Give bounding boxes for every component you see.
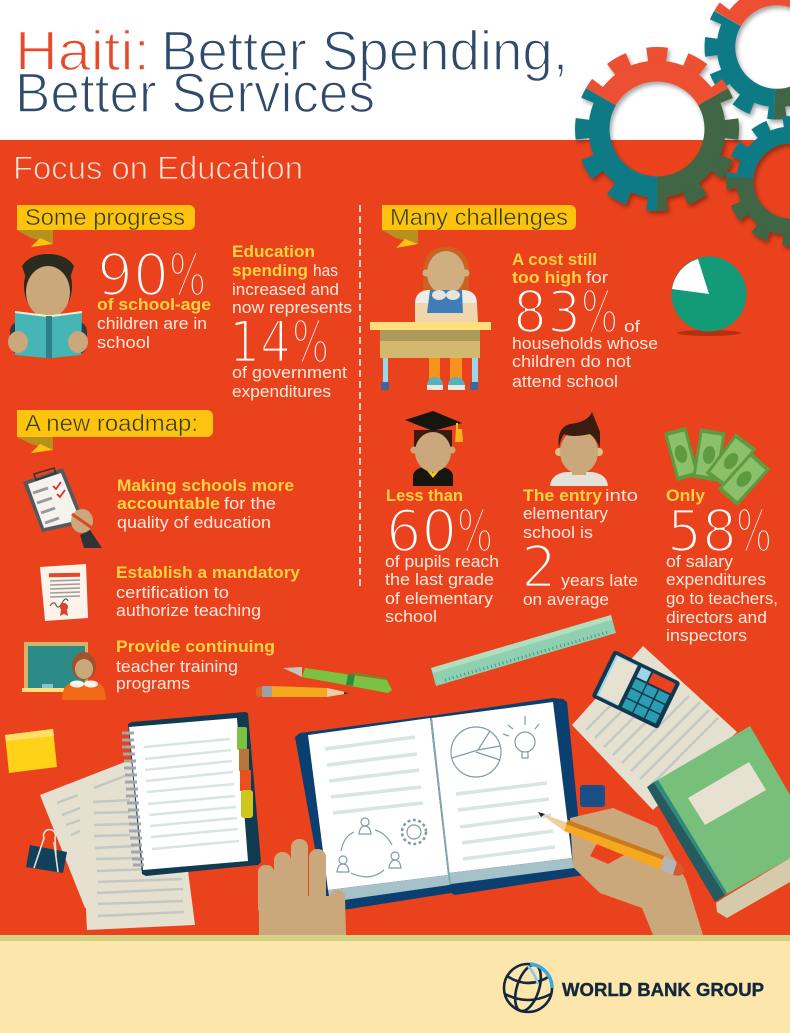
divider <box>359 205 361 590</box>
stat: 58 percent salary: expenditures <box>666 571 766 589</box>
stat: 90 percent in school: of school-age <box>97 296 211 314</box>
stat: 2 years late: 2 <box>521 533 557 601</box>
stat: 83 percent cost too high: children do not <box>512 353 631 371</box>
illustration: green pen <box>283 667 392 693</box>
text: certification <box>116 564 301 620</box>
gear: lower right <box>732 122 790 240</box>
stat: 58 percent salary: % <box>736 497 772 565</box>
stat: 58 percent salary: Only <box>666 487 706 505</box>
stat: 58 percent salary: go to teachers, <box>666 590 778 608</box>
section label: new roadmap: A new roadmap: <box>25 410 198 436</box>
stat: 2 years late: elementary <box>523 505 609 523</box>
stat: 60 percent last grade: Less than <box>386 487 463 505</box>
text: teacher training <box>116 638 275 693</box>
stat: 58 percent salary: of salary <box>666 553 734 571</box>
stat: 83 percent cost too high: % <box>581 278 618 346</box>
logo: World Bank Group <box>504 962 764 1014</box>
stat: 60 percent last grade: of pupils reach <box>385 553 499 571</box>
stat: 90 percent in school: children are in <box>97 315 207 333</box>
stat: 83 percent cost too high: 83 <box>513 278 581 346</box>
stat: 83 percent cost too high: of <box>624 318 640 336</box>
illustration: green book <box>647 726 790 918</box>
illustration: sticky note <box>5 729 57 773</box>
stat: 14 percent spending: expenditures <box>232 383 331 401</box>
stat: 60 percent last grade <box>385 487 499 626</box>
stat: 2 years late: years late <box>561 572 638 590</box>
stat: 90 percent in school: school <box>97 334 150 352</box>
icon: certificate <box>40 564 88 621</box>
section label: some progress: Some progress <box>25 204 185 230</box>
stat: 83 percent cost too high: A cost still <box>512 251 597 269</box>
illustration: loose papers <box>40 760 195 930</box>
stat: 14 percent spending: 14 <box>229 308 291 376</box>
text: accountability: for the <box>224 495 276 513</box>
icon: girl at desk <box>370 247 491 390</box>
title: Better Spending, <box>161 19 568 82</box>
section label: many challenges: Many challenges <box>390 204 568 230</box>
stat: 58 percent salary: inspectors <box>666 627 747 645</box>
gear: large centre <box>582 54 732 204</box>
text: accountability: accountable <box>117 495 220 513</box>
stat: 58 percent salary: 58 <box>667 497 737 565</box>
stat: 60 percent last grade: the last grade <box>385 571 494 589</box>
stat: 83 percent cost too high: for <box>586 269 609 287</box>
stat: 2 years late: on average <box>523 591 609 609</box>
title: Haiti: <box>15 19 150 82</box>
stat: 60 percent last grade: of elementary <box>385 590 494 608</box>
logo: World Bank Group: WORLD BANK GROUP <box>562 979 764 1000</box>
stat: 90 percent in school: % <box>169 241 206 309</box>
section label: some progress <box>17 204 195 247</box>
illustration: right hand with pencil <box>538 808 703 935</box>
text: teacher training: teacher training <box>116 658 238 676</box>
icon: graduate <box>405 411 463 486</box>
stat: 83 percent cost too high: too high <box>512 269 582 287</box>
text: accountability <box>117 477 294 532</box>
title: Better Services <box>15 61 375 124</box>
stat: 58 percent salary: directors and <box>666 609 767 627</box>
sketch: pie and light bulb <box>451 716 539 777</box>
stat: 2 years late <box>521 487 638 609</box>
icon: globe <box>504 962 552 1014</box>
icon: teacher at chalkboard <box>22 642 106 700</box>
subtitle: Focus on Education <box>13 150 303 186</box>
stat: 14 percent spending: Education <box>232 243 315 261</box>
stat: 90 percent in school <box>97 241 211 352</box>
icon: clipboard <box>23 468 102 548</box>
illustration: spiral notebook <box>122 712 261 876</box>
section label: many challenges <box>382 204 576 248</box>
stat: 14 percent spending: now represents <box>232 299 352 317</box>
stat: 2 years late: into <box>605 487 638 505</box>
stat: 83 percent cost too high <box>512 251 658 391</box>
stat: 14 percent spending: of government <box>232 364 347 382</box>
sketch: gear and people cycle <box>337 818 426 877</box>
section label: new roadmap <box>17 410 213 453</box>
illustration: ruler <box>431 615 616 686</box>
text: teacher training: Provide continuing <box>116 638 275 656</box>
stat: 60 percent last grade: school <box>385 608 437 626</box>
title <box>15 19 568 124</box>
stat: 14 percent spending: increased and <box>232 281 339 299</box>
text: teacher training: programs <box>116 675 190 693</box>
text: certification: authorize teaching <box>116 602 261 620</box>
icon: banknotes <box>664 427 770 506</box>
stat: 14 percent spending: % <box>292 308 329 376</box>
text: certification: Establish a mandatory <box>116 564 301 582</box>
illustration: calculator <box>591 650 681 729</box>
text: certification: certification to <box>116 584 229 602</box>
stat: 2 years late: The entry <box>523 487 603 505</box>
gear: top right <box>711 0 790 113</box>
illustration: paper under calculator <box>572 646 737 810</box>
stat: 60 percent last grade: 60 <box>386 497 457 565</box>
stat: 14 percent spending: has <box>313 262 338 280</box>
gears <box>582 0 790 240</box>
pie chart: 83 percent <box>672 256 746 336</box>
stat: 60 percent last grade: % <box>457 497 493 565</box>
illustration: open book <box>295 698 605 912</box>
illustration: binder clip <box>26 830 67 873</box>
stat: 90 percent in school: 90 <box>97 241 169 309</box>
stat: 58 percent salary <box>666 487 778 645</box>
illustration: pencil small <box>256 686 350 697</box>
icon: boy <box>550 412 608 486</box>
stat: 2 years late: school is <box>523 524 593 542</box>
stat: 14 percent spending <box>229 243 352 401</box>
icon: child reading <box>8 254 88 358</box>
stat: 83 percent cost too high: households whose <box>512 335 658 353</box>
illustration: left hand <box>258 839 346 935</box>
stat: 83 percent cost too high: attend school <box>512 373 618 391</box>
text: accountability: quality of education <box>117 514 271 532</box>
text: accountability: Making schools more <box>117 477 294 495</box>
stat: 14 percent spending: spending <box>232 262 308 280</box>
